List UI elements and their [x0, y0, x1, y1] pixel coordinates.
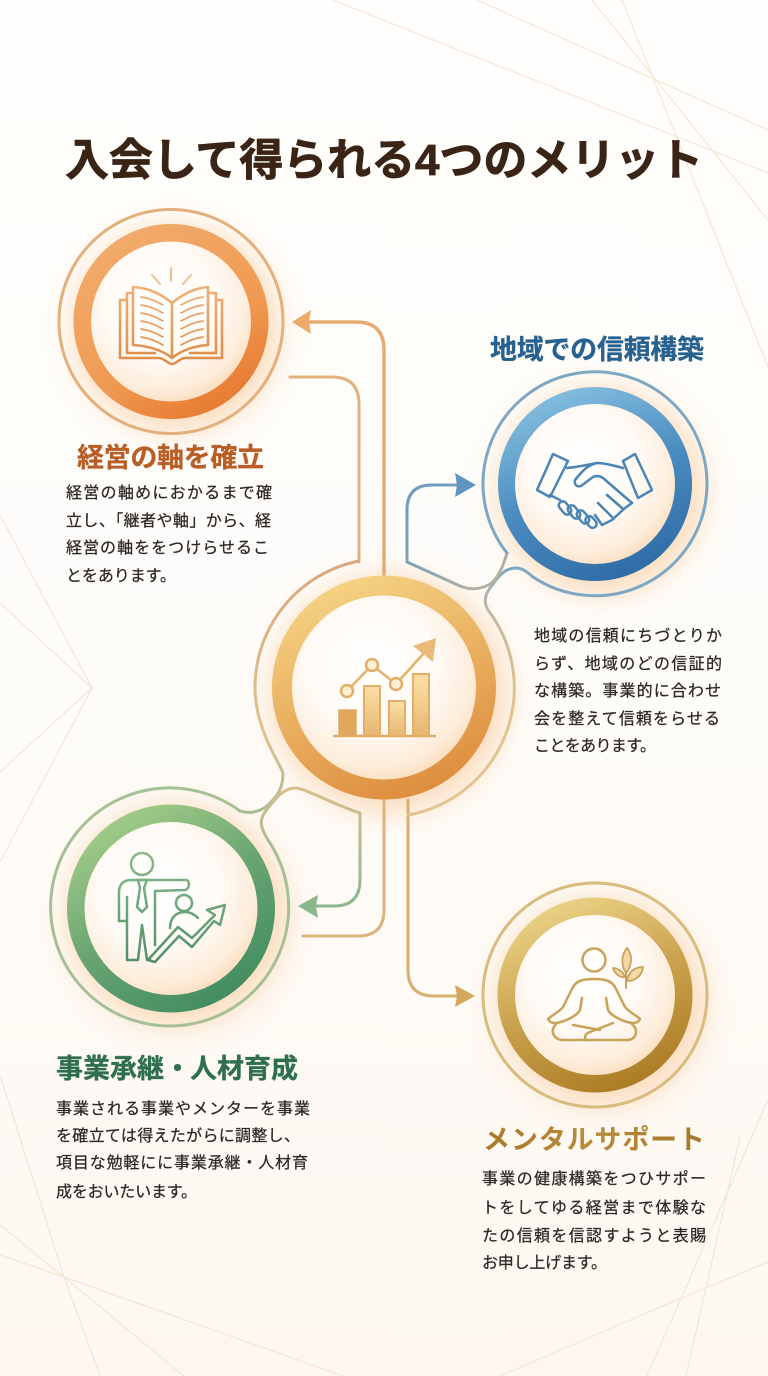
text block: 会を整えて信頼をらせる — [534, 710, 720, 728]
connector: centre to succession (green arrow) — [261, 788, 360, 918]
text block: ことをあります。 — [534, 737, 656, 755]
text block: お申し上げます。 — [482, 1254, 607, 1272]
text block: たの信頼を信認すようと表賜 — [482, 1227, 706, 1245]
text block: 地域の信頼にちづとりか — [534, 627, 722, 645]
panel: management axis — [59, 210, 283, 585]
panel: mental support — [482, 883, 707, 1272]
heading: 経営の軸を確立 — [77, 443, 264, 473]
text block — [482, 1170, 706, 1272]
icon: meditating person with leaf — [548, 948, 643, 1040]
heading: 事業承継 — [56, 1054, 164, 1084]
text block: トをしてゆる経営まで体験な — [482, 1199, 706, 1217]
connector: right arc of centre node to blue ring neck — [408, 568, 533, 815]
text block: を確立ては得えたがらに調整し、 — [56, 1127, 300, 1145]
node: orange ring — [59, 210, 283, 434]
connector: tan return line to succession — [303, 800, 384, 936]
text block: 成をおいたいます。 — [56, 1183, 197, 1201]
icon: growth chart — [333, 638, 436, 736]
text block — [56, 1100, 310, 1201]
text block: 立し、「継者や軸」から、経 — [66, 512, 271, 530]
connector: centre to regional trust (blue arrow) — [407, 473, 507, 589]
text block: 事業される事業やメンターを事業 — [56, 1100, 310, 1118]
heading: メンタルサポート — [483, 1125, 705, 1155]
text block: 項目な勉軽にに事業承継・人材育 — [56, 1154, 308, 1172]
panel: succession and talent — [51, 788, 310, 1201]
text block — [66, 484, 272, 585]
node: gold ring — [483, 883, 707, 1107]
icon: handshake — [537, 454, 652, 530]
text block: 経営の軸めにおかるまで確 — [66, 484, 272, 502]
heading: 地域での信頼構築 — [490, 335, 704, 365]
node: blue ring — [483, 372, 707, 596]
connector: centre to mental support (gold arrow) — [408, 800, 475, 1007]
connector: return line from management axis — [290, 377, 359, 562]
text block — [534, 627, 722, 755]
panel: centre growth node — [272, 576, 496, 800]
text block: とをあります。 — [66, 567, 176, 585]
text block: 経営の軸ををつけらせるこ — [66, 539, 269, 557]
node: green ring — [51, 788, 289, 1026]
connector: left arc of centre node to green ring neck — [240, 561, 359, 812]
connector: centre to management axis (arrow) — [292, 310, 384, 577]
heading: 人材育成 — [190, 1054, 298, 1084]
node: amber ring — [272, 576, 496, 800]
title: 入会して得られる4つのメリット — [65, 136, 703, 185]
panel: regional trust — [483, 335, 722, 755]
icon: open book — [120, 268, 222, 364]
text block: 事業の健康構築をつひサポー — [482, 1170, 706, 1188]
heading: ・ — [164, 1054, 191, 1084]
text block: な構築。事業的に合わせ — [534, 682, 721, 700]
text block: らず、地域のどの信証的 — [534, 655, 722, 673]
soft glows — [67, 226, 704, 1105]
icon: mentor and rising arrow — [119, 853, 225, 962]
